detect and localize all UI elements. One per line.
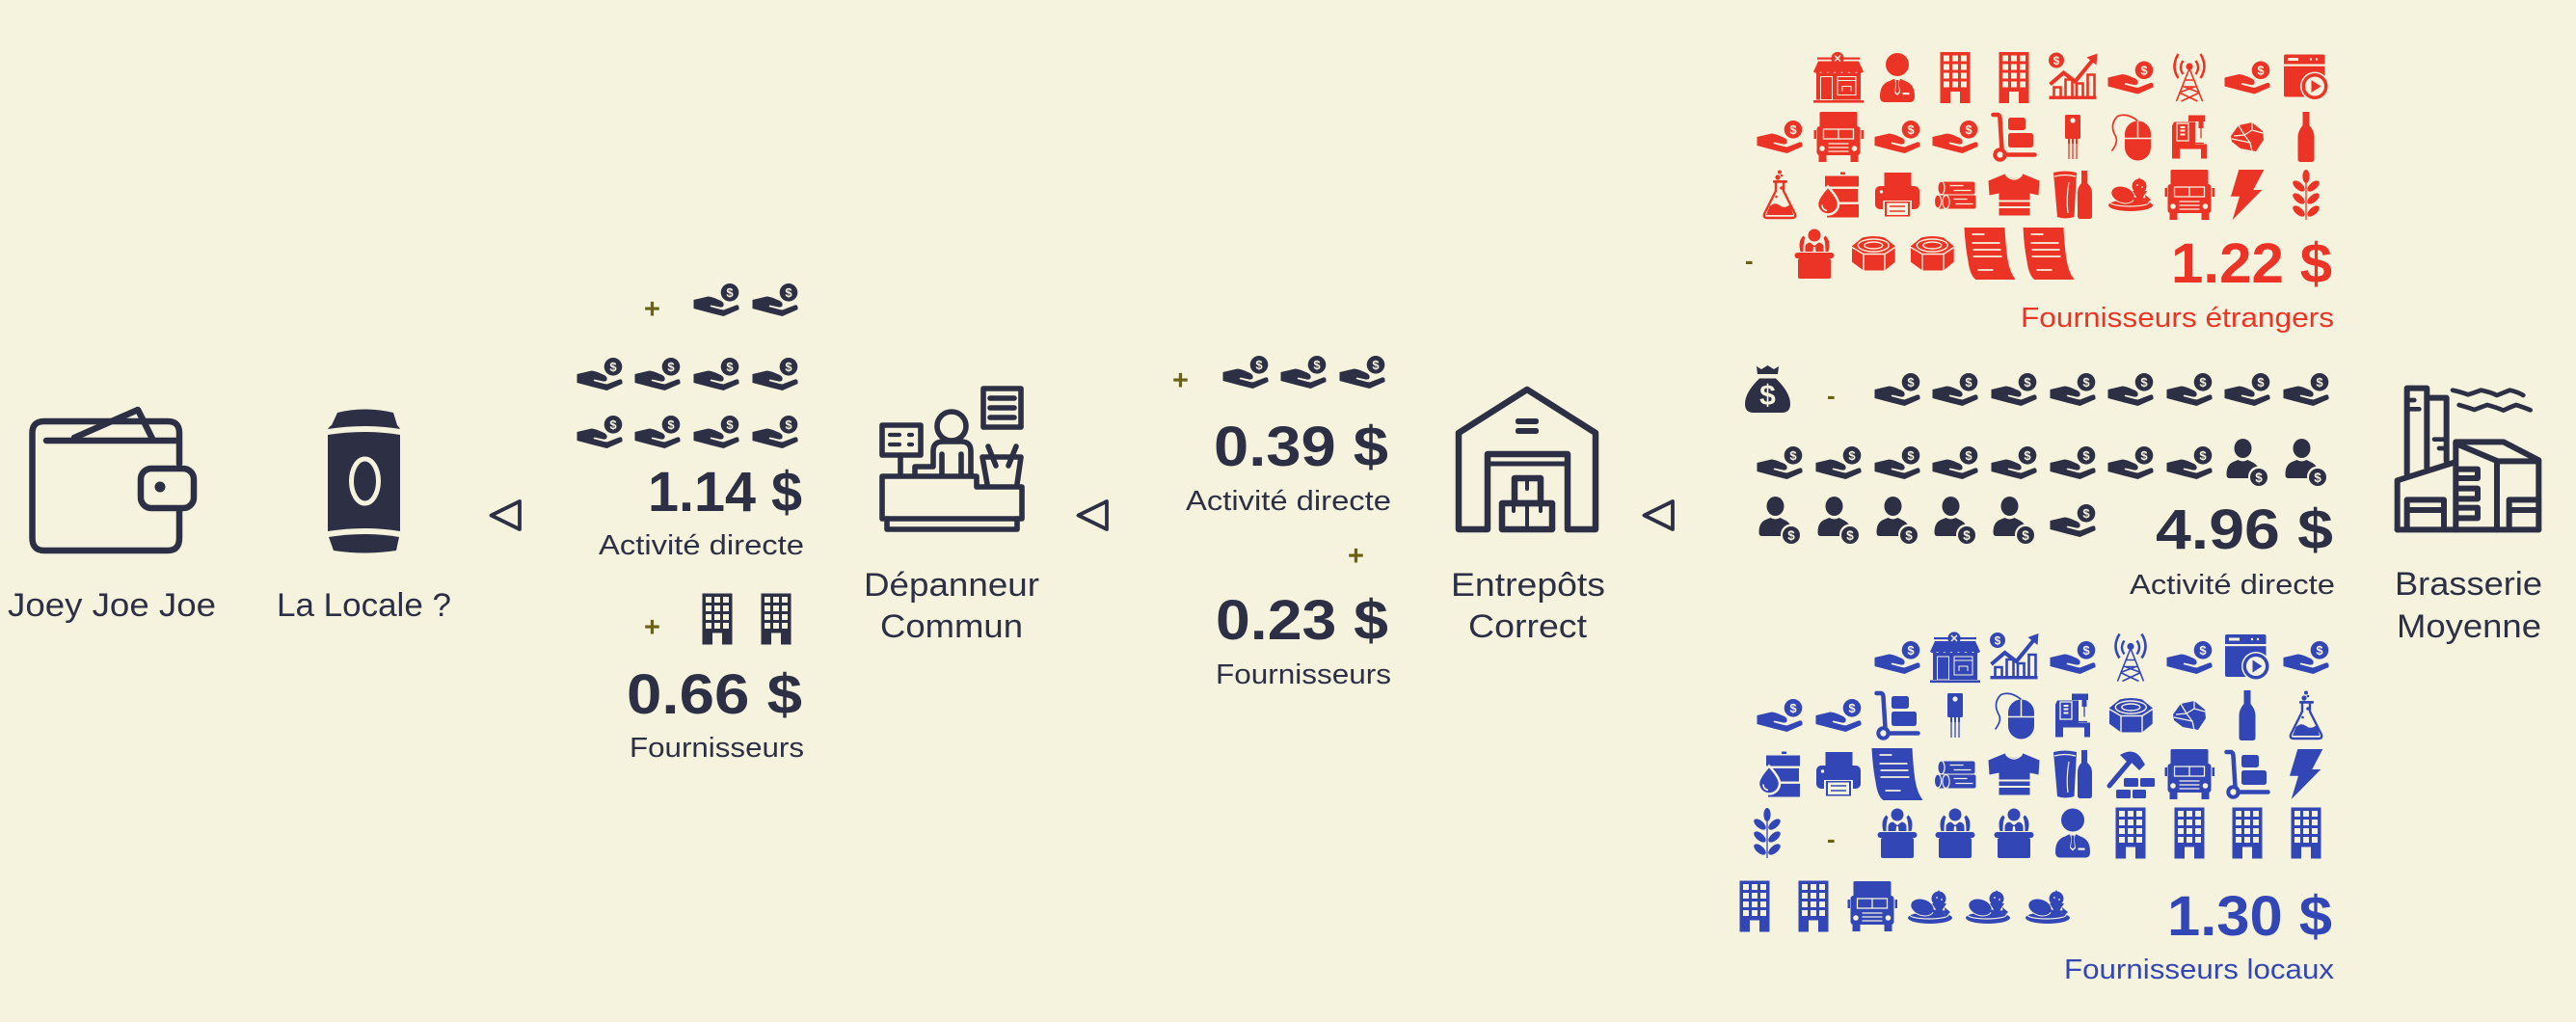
label: Dépanneur Commun: Dépanneur [864,567,1039,604]
minus sign: - [1827,381,1836,410]
value 1.22 $: 1.22 $ [2171,232,2332,295]
label: Fournisseurs étrangers: Fournisseurs étrangers [2021,303,2334,334]
icons: direct activity hands [1222,356,1384,389]
panel: consumer [8,410,216,624]
label: Fournisseurs: Fournisseurs [1216,659,1391,690]
icon: money bag [1745,365,1790,413]
panel: brewery [2395,389,2542,645]
label: Activité directe: Activité directe [599,530,804,561]
icon: hammer and bricks [2109,751,2155,798]
value 4.96 $: 4.96 $ [2156,498,2333,561]
plus sign: + [644,294,660,325]
panel: direct activity of the brewery [1745,365,2335,601]
icon grid: foreign suppliers [1757,52,2329,280]
label: Entrepôts Correct: Entrepôts [1451,567,1605,604]
panel: warehouse [1451,390,1605,645]
icon: beer can [328,409,400,553]
icon grid: local suppliers [1739,632,2329,931]
arrow 3 [1645,501,1673,529]
label: Dépanneur Commun: Commun [880,608,1023,645]
value 0.39 $: 0.39 $ [1214,416,1388,478]
label: Entrepôts Correct: Correct [1468,608,1588,645]
panel: foreign suppliers [1745,52,2334,334]
plus sign: + [644,612,660,643]
value 1.30 $: 1.30 $ [2167,885,2332,948]
label: Entrepôts Correct [1451,567,1605,645]
panel: convenience store [864,389,1039,645]
icon: factory [2398,389,2538,529]
icons: supplier buildings [702,594,791,644]
value 1.14 $: 1.14 $ [648,461,802,524]
label: Brasserie Moyenne [2395,566,2542,645]
label: Brasserie Moyenne: Moyenne [2397,608,2541,645]
value 0.66 $: 0.66 $ [627,663,802,726]
minus sign: - [1827,824,1836,853]
value 0.23 $: 0.23 $ [1216,589,1388,652]
arrow 1 [492,501,520,529]
label: Dépanneur Commun [864,567,1039,645]
icon grid: direct activity [1757,373,2329,546]
icon: warehouse [1459,390,1596,529]
plus sign: + [1172,365,1189,396]
arrow 2 [1078,501,1107,529]
panel: warehouse margin breakdown [1172,356,1391,690]
label: Activité directe: Activité directe [2130,570,2335,601]
icon: wallet [33,410,194,551]
label: Joey Joe Joe: Joey Joe Joe [8,587,216,624]
panel: local suppliers [1739,632,2335,985]
plus sign: + [1348,541,1364,572]
panel: product [277,409,451,624]
icon: shop counter [882,389,1022,529]
minus sign: - [1745,246,1754,275]
label: Fournisseurs: Fournisseurs [630,733,804,764]
label: Brasserie Moyenne: Brasserie [2395,566,2542,603]
label: Activité directe: Activité directe [1186,486,1391,517]
label: Fournisseurs locaux: Fournisseurs locaux [2064,955,2335,985]
panel: retail margin breakdown [577,283,804,764]
icons: direct activity hands [577,283,798,448]
label: La Locale ?: La Locale ? [277,587,451,624]
